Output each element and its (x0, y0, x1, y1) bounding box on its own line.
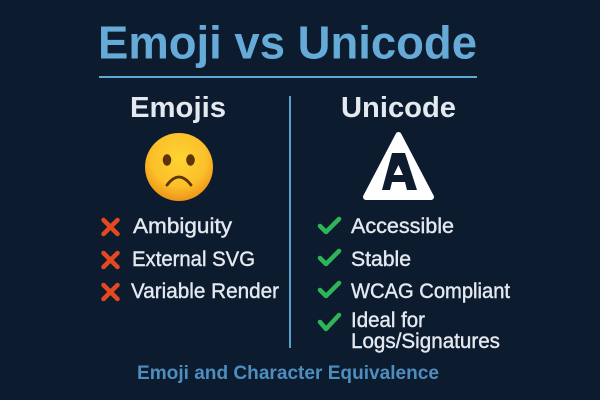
item: ideal for logs/signatures: Logs/Signatures (351, 330, 500, 353)
icon: check (320, 251, 339, 264)
icon: cross (104, 220, 118, 234)
title: Emoji vs Unicode (98, 16, 477, 68)
item: ideal for logs/signatures (351, 309, 500, 353)
item: ambiguity: Ambiguity (133, 215, 233, 238)
item: accessible: Accessible (351, 215, 454, 238)
item: stable: Stable (351, 248, 411, 271)
icon: sad face emoji (145, 133, 213, 201)
list: emoji drawbacks (104, 215, 279, 303)
icon: letter A triangle (366, 135, 431, 197)
icon: check (320, 315, 339, 329)
item: wcag compliant: WCAG Compliant (351, 280, 510, 303)
panel: unicode (320, 92, 510, 353)
caption: Emoji and Character Equivalence (137, 363, 439, 384)
item: variable render: Variable Render (131, 280, 279, 303)
icon: cross (104, 285, 118, 299)
list: unicode benefits (320, 215, 510, 353)
item: external svg: External SVG (132, 248, 255, 271)
heading: unicode: Unicode (341, 92, 456, 124)
icon: check (320, 283, 339, 296)
icon: check (320, 219, 339, 232)
panel: emojis (104, 92, 279, 303)
item: ideal for logs/signatures: Ideal for (351, 309, 425, 332)
icon: cross (104, 253, 118, 267)
heading: emojis: Emojis (130, 92, 226, 124)
